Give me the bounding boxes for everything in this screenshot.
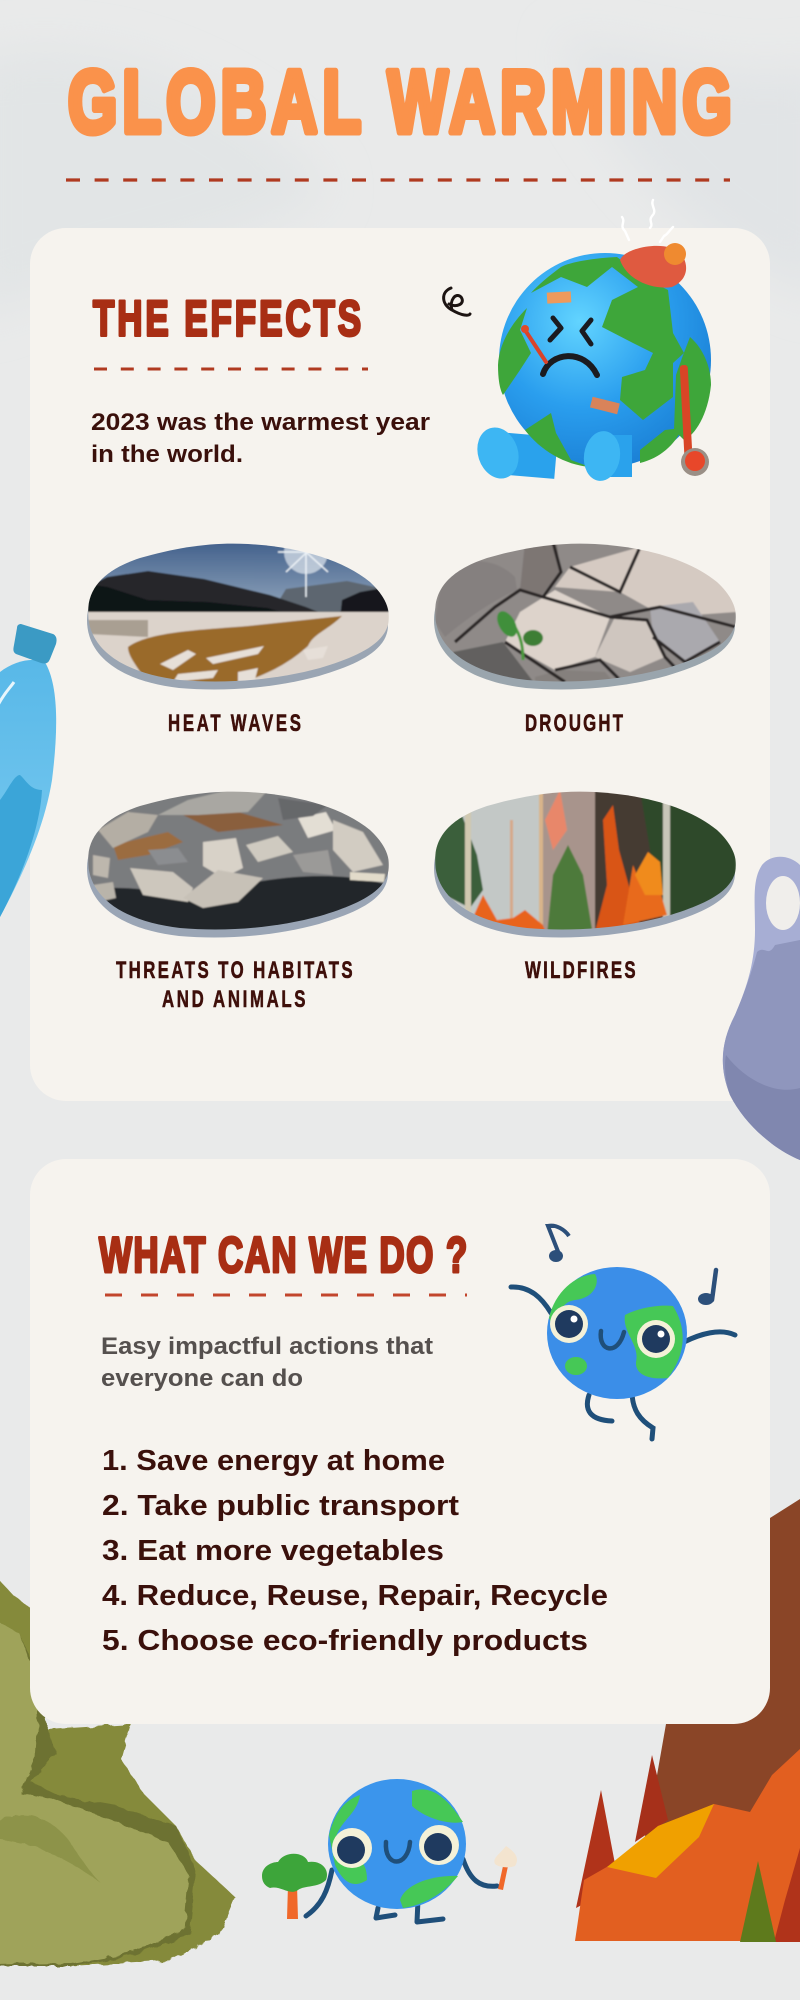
- panel: what can we do: [30, 1159, 770, 1724]
- right leg: [604, 435, 632, 477]
- illustration: plastic bottle: [0, 624, 57, 917]
- text: warmest year: 2023 was the warmest year: [91, 409, 430, 436]
- icon: earth with tree and torch: [262, 1779, 517, 1922]
- icon: music notes: [548, 1226, 716, 1305]
- photo: wildfires: [434, 790, 736, 938]
- icon: squiggle: [444, 288, 470, 315]
- steam: [622, 200, 673, 242]
- icon: tree: [262, 1854, 327, 1919]
- divider: action stitches: [105, 1294, 467, 1296]
- divider: title stitches: [66, 178, 730, 182]
- list: actions: 2. Take public transport: [102, 1490, 459, 1522]
- text: intro: Easy impactful actions that: [101, 1333, 433, 1360]
- label: threats to habitats and animals: AND ANIMALS: [162, 986, 305, 1013]
- photo: drought: [434, 542, 736, 690]
- panel: the effects: [30, 200, 770, 1101]
- illustration: green bush: [0, 1570, 235, 1966]
- bandages: [547, 291, 571, 304]
- icon: dancing earth: [511, 1226, 735, 1439]
- left leg: [497, 453, 556, 458]
- title: GLOBAL WARMING: [68, 54, 732, 152]
- list: actions: 4. Reduce, Reuse, Repair, Recycle: [102, 1580, 608, 1612]
- land: [531, 257, 684, 420]
- heading: the effects: THE EFFECTS: [93, 291, 361, 347]
- hot pack: [620, 246, 686, 288]
- list: actions: 5. Choose eco-friendly products: [102, 1625, 588, 1657]
- label: heat waves: HEAT WAVES: [168, 710, 301, 737]
- list: actions: [102, 1445, 608, 1657]
- icon: sick earth: [471, 200, 711, 484]
- thermometer: [680, 365, 692, 457]
- text: warmest year: in the world.: [91, 441, 243, 468]
- text: warmest year: [91, 409, 430, 468]
- illustration: mountains and trees: [575, 1499, 800, 1942]
- label: threats to habitats and animals: [116, 957, 353, 1013]
- photo: heat waves: [87, 530, 389, 692]
- label: wildfires: WILDFIRES: [525, 957, 636, 984]
- photo: threats to habitats: [87, 790, 389, 938]
- icon: torch: [494, 1846, 517, 1890]
- heading: what can we do: WHAT CAN WE DO ?: [99, 1228, 467, 1284]
- face: [550, 318, 591, 344]
- list: actions: 1. Save energy at home: [102, 1445, 445, 1477]
- label: threats to habitats and animals: THREATS TO HABITATS: [116, 957, 353, 984]
- text: intro: everyone can do: [101, 1365, 303, 1392]
- label: drought: DROUGHT: [525, 710, 623, 737]
- text: intro: [101, 1333, 433, 1392]
- divider: effects stitches: [94, 368, 368, 370]
- list: actions: 3. Eat more vegetables: [102, 1535, 444, 1567]
- illustration: plastic bag: [723, 857, 800, 1160]
